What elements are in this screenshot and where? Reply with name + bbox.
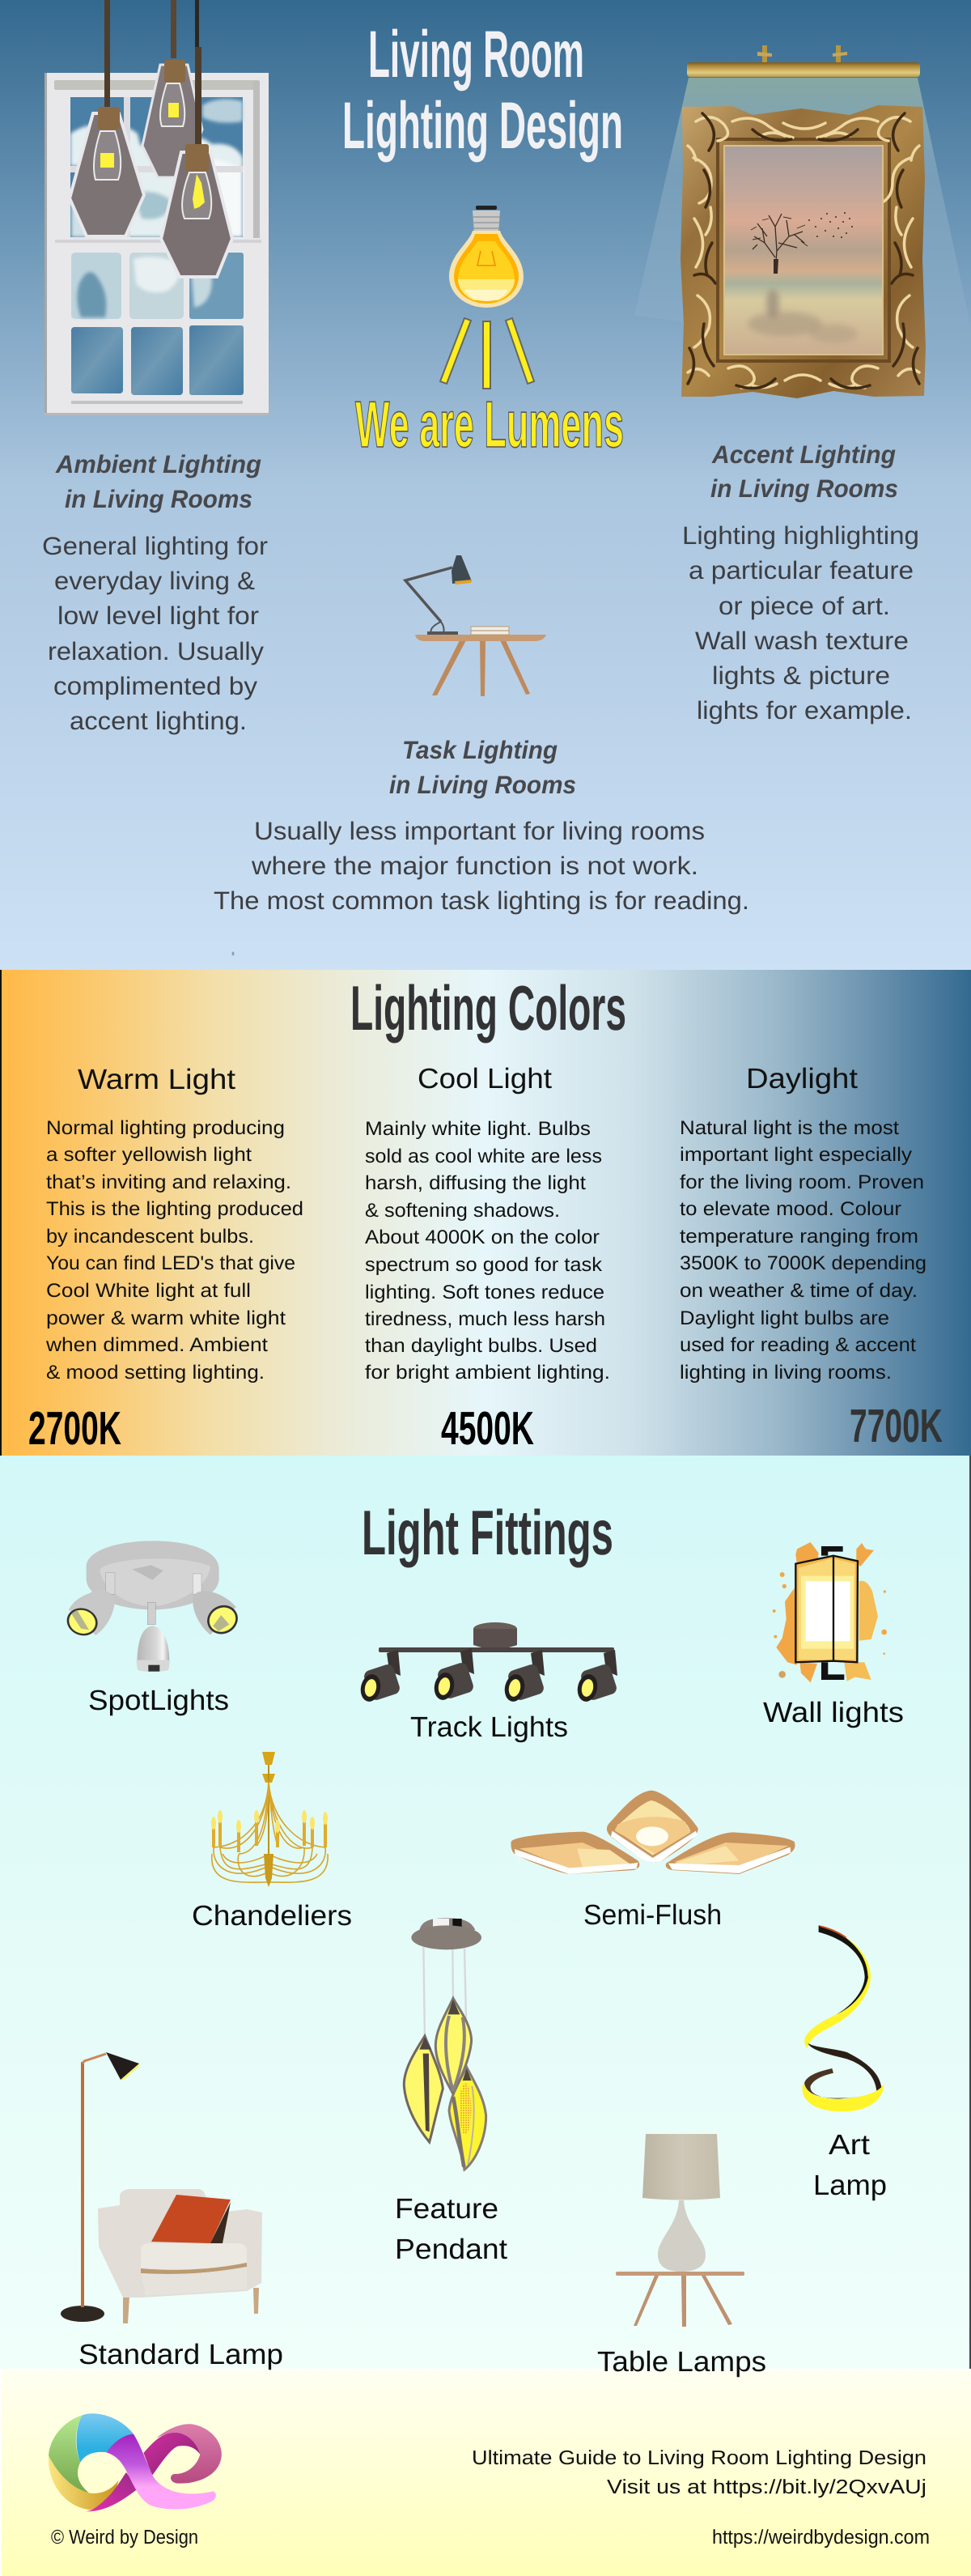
text block: task lighting: where the major function is not work. xyxy=(251,852,698,880)
illustration: pendant lights over window xyxy=(45,0,269,415)
fitting: spotlights: SpotLights xyxy=(88,1685,229,1716)
column: cool light: Cool Light xyxy=(418,1063,552,1095)
column: cool light: lighting. Soft tones reduce xyxy=(365,1282,604,1303)
text block: task lighting: Task Lighting xyxy=(402,736,558,764)
text block: task lighting: Usually less important for living rooms xyxy=(254,817,705,845)
website url: https://weirdbydesign.com xyxy=(712,2527,930,2548)
fitting: standard lamp with armchair xyxy=(61,2052,283,2370)
fitting: chandeliers xyxy=(192,1752,352,1932)
column: cool light: 4500K xyxy=(441,1402,534,1455)
column: daylight: Daylight light bulbs are xyxy=(680,1307,889,1329)
text block: ambient lighting: in Living Rooms xyxy=(65,485,252,513)
slogan: we are lumens: We are Lumens xyxy=(355,389,624,461)
fitting: semi-flush xyxy=(511,1791,795,1931)
text block: accent lighting xyxy=(682,440,919,725)
column: cool light: About 4000K on the color xyxy=(365,1226,600,1248)
heading: lighting colors: Lighting Colors xyxy=(350,972,626,1044)
column: daylight: important light especially xyxy=(680,1144,912,1166)
text block: accent lighting: a particular feature xyxy=(689,556,914,584)
fitting: art lamp xyxy=(803,1925,887,2201)
column: cool light xyxy=(365,1063,610,1455)
panel: light fittings xyxy=(0,1456,971,2378)
column: cool light: harsh, diffusing the light xyxy=(365,1172,586,1194)
panel: footer xyxy=(2,2369,971,2576)
text block: accent lighting: lights & picture xyxy=(712,661,890,690)
column: warm light: Cool White light at full xyxy=(46,1280,251,1302)
fitting: standard lamp with armchair: Standard Lamp xyxy=(78,2339,283,2370)
fitting: feature pendant xyxy=(395,1918,507,2265)
column: daylight: temperature ranging from xyxy=(680,1226,918,1248)
title xyxy=(342,18,623,163)
pendant lamp: front xyxy=(161,0,232,277)
column: warm light: a softer yellowish light xyxy=(46,1144,252,1166)
picture light bar xyxy=(687,45,920,77)
column: daylight: used for reading & accent xyxy=(680,1334,916,1356)
title: Living Room xyxy=(368,18,584,91)
column: cool light: Mainly white light. Bulbs xyxy=(365,1118,591,1140)
text block: ambient lighting: General lighting for xyxy=(42,532,268,560)
window frame xyxy=(45,73,269,415)
fitting: feature pendant: Feature xyxy=(395,2193,498,2225)
text block: ambient lighting xyxy=(42,450,268,735)
text block: ambient lighting: low level light for xyxy=(57,601,259,630)
column: cool light: tiredness, much less harsh xyxy=(365,1308,605,1330)
window panes with sky xyxy=(70,97,244,395)
fitting: chandeliers: Chandeliers xyxy=(192,1900,352,1932)
column: daylight xyxy=(680,1063,943,1452)
illustration: framed painting with picture light xyxy=(634,45,971,398)
column: daylight: Natural light is the most xyxy=(680,1117,899,1139)
title: Lighting Design xyxy=(342,89,623,163)
column: daylight: 3500K to 7000K depending xyxy=(680,1252,926,1274)
pendant lamp: left xyxy=(70,0,144,236)
column: daylight: Daylight xyxy=(746,1063,858,1095)
column: daylight: for the living room. Proven xyxy=(680,1171,924,1193)
text block: accent lighting: in Living Rooms xyxy=(710,474,898,503)
fitting: art lamp: Art xyxy=(829,2129,870,2161)
column: warm light: Warm Light xyxy=(78,1064,235,1095)
column: daylight: to elevate mood. Colour xyxy=(680,1198,901,1220)
fitting: track lights: Track Lights xyxy=(410,1711,568,1743)
copyright: © Weird by Design xyxy=(51,2527,198,2548)
column: cool light: & softening shadows. xyxy=(365,1200,560,1222)
fitting: wall lights xyxy=(763,1542,904,1728)
column: cool light: spectrum so good for task xyxy=(365,1254,603,1276)
panel background xyxy=(0,1456,971,2369)
heading: light fittings: Light Fittings xyxy=(362,1497,613,1568)
panel background gradient warm to daylight xyxy=(0,970,971,1456)
text block: accent lighting: Wall wash texture xyxy=(695,627,909,655)
column: warm light: that’s inviting and relaxing. xyxy=(46,1171,291,1193)
text block: accent lighting: Lighting highlighting xyxy=(682,521,919,550)
column: warm light: power & warm white light xyxy=(46,1307,286,1329)
column: warm light: Normal lighting producing xyxy=(46,1117,285,1139)
column: warm light: by incandescent bulbs. xyxy=(46,1226,254,1248)
column: cool light: than daylight bulbs. Used xyxy=(365,1335,597,1357)
column: daylight: lighting in living rooms. xyxy=(680,1362,892,1384)
text block: ambient lighting: relaxation. Usually xyxy=(48,637,265,665)
text block: accent lighting: or piece of art. xyxy=(719,592,890,620)
illustration: desk lamp on side table xyxy=(405,555,546,696)
ornate gold frame xyxy=(681,105,926,398)
column: warm light: This is the lighting produced xyxy=(46,1198,303,1220)
fitting: feature pendant: Pendant xyxy=(395,2234,507,2265)
fitting: semi-flush: Semi-Flush xyxy=(583,1899,722,1931)
floor lamp xyxy=(61,2052,139,2322)
painting: lone tree at sunset xyxy=(724,146,883,355)
fitting: art lamp: Lamp xyxy=(813,2170,887,2201)
guide title and link: Visit us at https://bit.ly/2QxvAUj xyxy=(607,2476,926,2498)
column: cool light: for bright ambient lighting. xyxy=(365,1362,610,1384)
footer background xyxy=(2,2369,971,2576)
logo: weird by design xyxy=(49,2413,222,2511)
fitting: table lamp: Table Lamps xyxy=(597,2346,766,2378)
light cone xyxy=(634,78,971,356)
icon: glowing light bulb xyxy=(449,206,524,308)
fitting: spotlights xyxy=(63,1541,243,1716)
panel: lighting colors xyxy=(0,970,971,1456)
fitting: wall lights: Wall lights xyxy=(763,1697,904,1728)
fitting: table lamp xyxy=(597,2134,766,2378)
column: daylight: on weather & time of day. xyxy=(680,1280,918,1302)
text block: accent lighting: lights for example. xyxy=(697,696,912,725)
text block: accent lighting: Accent Lighting xyxy=(711,440,896,469)
armchair with red cushion xyxy=(98,2189,262,2323)
text block: ambient lighting: accent lighting. xyxy=(70,707,247,735)
text block: ambient lighting: Ambient Lighting xyxy=(55,450,261,478)
column: warm light: when dimmed. Ambient xyxy=(45,1334,268,1356)
icon: three light rays xyxy=(440,318,534,389)
panel background xyxy=(0,0,971,970)
panel: types of lighting xyxy=(0,0,971,970)
column: warm light: You can find LED's that give xyxy=(46,1252,295,1274)
text block: task lighting xyxy=(214,736,749,915)
column: cool light: sold as cool white are less xyxy=(365,1146,602,1167)
column: warm light: & mood setting lighting. xyxy=(46,1362,265,1384)
column: warm light xyxy=(28,1064,303,1455)
text block: ambient lighting: everyday living & xyxy=(54,567,255,595)
pendant lamp: back xyxy=(142,0,202,177)
guide title and link: Ultimate Guide to Living Room Lighting Design xyxy=(472,2447,926,2469)
text block: task lighting: The most common task lighting is for reading. xyxy=(214,886,749,915)
text block: ambient lighting: complimented by xyxy=(53,672,258,700)
guide title and link xyxy=(472,2447,926,2498)
column: warm light: 2700K xyxy=(28,1402,121,1455)
text block: task lighting: in Living Rooms xyxy=(389,771,576,799)
fitting: track lights xyxy=(358,1622,618,1743)
